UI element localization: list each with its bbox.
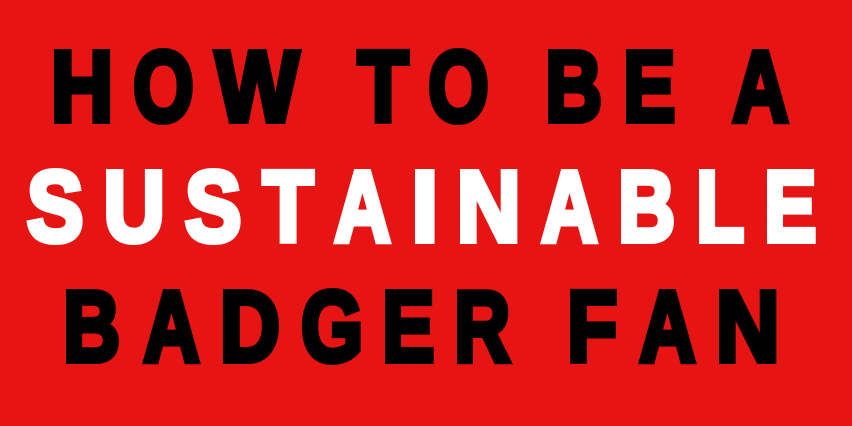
- heading line 3: BADGER FAN: A: [143, 271, 200, 383]
- heading line 2: SUSTAINABLE: E: [764, 151, 816, 263]
- heading line 3: BADGER FAN: R: [454, 271, 510, 383]
- heading line 1: HOW TO BE A: E: [623, 31, 675, 143]
- heading line 3: BADGER FAN: B: [63, 271, 120, 383]
- heading line 2: SUSTAINABLE: B: [618, 151, 675, 263]
- heading line 2: SUSTAINABLE: A: [541, 151, 598, 263]
- heading line 2: SUSTAINABLE: L: [696, 151, 744, 263]
- heading line 3: BADGER FAN: E: [382, 271, 434, 383]
- heading line 1: HOW TO BE A: O: [133, 31, 194, 143]
- heading line 2: SUSTAINABLE: U: [103, 151, 165, 263]
- heading line 1: HOW TO BE A: W: [215, 31, 299, 143]
- heading line 3: BADGER FAN: F: [567, 271, 617, 383]
- heading line 2: SUSTAINABLE: S: [27, 151, 83, 263]
- heading line 2: SUSTAINABLE: I: [411, 151, 438, 263]
- heading line 3: BADGER FAN: N: [716, 271, 780, 383]
- heading line 1: HOW TO BE A: H: [51, 31, 113, 143]
- heading line 2: SUSTAINABLE: N: [457, 151, 521, 263]
- heading line 2: SUSTAINABLE: A: [334, 151, 391, 263]
- heading line 1: HOW TO BE A: T: [358, 31, 408, 143]
- heading line 1: HOW TO BE A: B: [545, 31, 602, 143]
- heading line 1: HOW TO BE A: A: [732, 31, 789, 143]
- heading line 2: SUSTAINABLE: S: [185, 151, 241, 263]
- heading line 2: SUSTAINABLE: T: [263, 151, 313, 263]
- heading line 3: BADGER FAN: D: [220, 271, 280, 383]
- heading line 3: BADGER FAN: G: [301, 271, 363, 383]
- heading line 1: HOW TO BE A: O: [428, 31, 489, 143]
- heading line 3: BADGER FAN: A: [639, 271, 696, 383]
